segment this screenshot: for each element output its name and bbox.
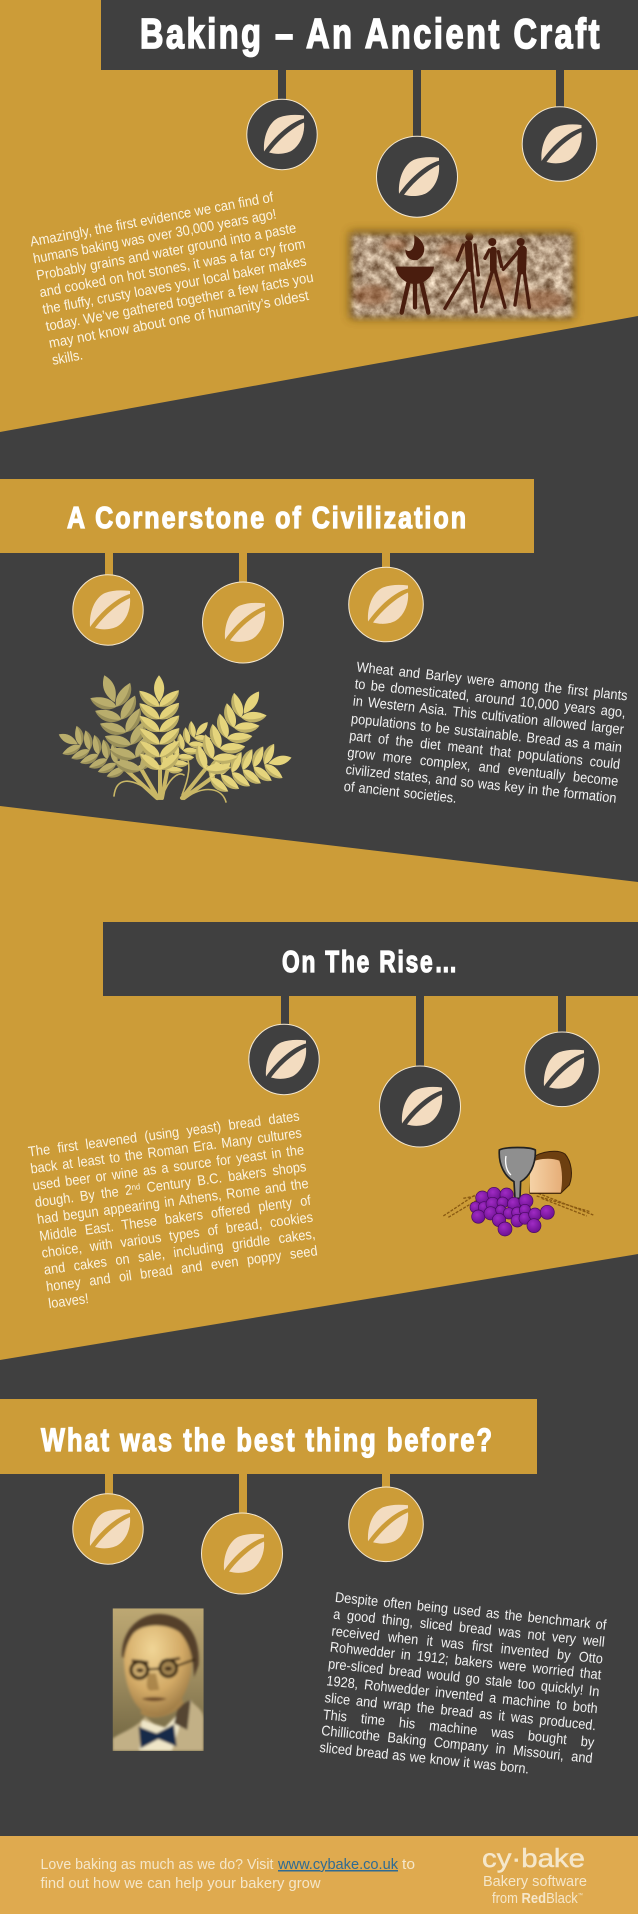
icon: hanging wheat grain medallions xyxy=(249,996,599,1147)
text block: leavened bread in the Roman era: The first leavened (using yeast) bread dates xyxy=(27,1109,301,1161)
text block: footer call to action: find out how we can help your bakery grow xyxy=(40,1875,321,1892)
text block: leavened bread in the Roman era: had begun appearing in Athens, Rome and the xyxy=(36,1176,310,1228)
heading bar: On The Rise xyxy=(103,922,638,996)
logo: cybake, bakery software from RedBlack: from RedBlack xyxy=(492,1890,583,1907)
text block: the invention of sliced bread: pre-sliced bread would go stale too quickly! In xyxy=(327,1657,600,1701)
image: portrait of Otto Rohwedder xyxy=(113,1608,204,1751)
text block: the invention of sliced bread: Despite often being used as the benchmark of xyxy=(334,1590,607,1634)
text block: the invention of sliced bread: Rohwedder in 1912; bakers were worried that xyxy=(329,1640,602,1684)
text block: footer call to action: www.cybake.co.uk xyxy=(277,1856,398,1873)
text block: first evidence of baking: and cooked on hot stones, it was a far cry from xyxy=(38,236,307,301)
text block: first evidence of baking: may not know about one of humanity’s oldest xyxy=(48,288,310,352)
text block: footer call to action xyxy=(40,1856,415,1892)
text block: first evidence of baking: Amazingly, the first evidence we can find of xyxy=(29,190,275,250)
icon: hanging wheat grain medallions xyxy=(73,1474,423,1594)
panel: section 3 on the rise xyxy=(27,922,638,1323)
text block: domestication of wheat and barley: to be domesticated, around 10,000 years ago, xyxy=(354,677,626,722)
logo: cybake, bakery software from RedBlack: Bakery software xyxy=(483,1873,587,1890)
logo: cybake, bakery software from RedBlack xyxy=(482,1843,587,1907)
text block: domestication of wheat and barley: Wheat and Barley were among the first plants xyxy=(356,660,628,704)
text block: the invention of sliced bread: a good thing, sliced bread was not very well xyxy=(332,1606,605,1650)
text block: domestication of wheat and barley: of ancient societies. xyxy=(343,779,457,807)
text block: domestication of wheat and barley: part of the diet meant that populations could xyxy=(348,728,621,773)
heading bar: A Cornerstone of Civilization xyxy=(0,479,534,553)
heading bar: A Cornerstone of Civilization: A Cornerstone of Civilization xyxy=(67,500,468,535)
text block: the invention of sliced bread: sliced bread as we know it was born. xyxy=(319,1740,530,1778)
text block: domestication of wheat and barley: populations to be sustainable. Bread as a main xyxy=(350,711,623,756)
heading bar: On The Rise: On The Rise… xyxy=(282,944,459,979)
heading bar: What was the best thing before? xyxy=(0,1399,537,1474)
text block: first evidence of baking: Probably grains and water ground into a paste xyxy=(35,220,298,284)
panel: section 1 ancient craft xyxy=(29,0,638,369)
text block: the invention of sliced bread: This time his machine was bought by xyxy=(322,1707,595,1751)
text block: leavened bread in the Roman era: used beer or wine as a source for yeast in the xyxy=(32,1142,305,1194)
text block: domestication of wheat and barley xyxy=(342,660,638,834)
text block: leavened bread in the Roman era: dough. By the 2nd Century B.C. bakers shops xyxy=(34,1159,307,1211)
panel: section 4 what was the best thing before xyxy=(0,1399,622,1798)
text block: leavened bread in the Roman era: loaves! xyxy=(47,1291,90,1312)
illustration: goblet, bread and grapes xyxy=(443,1147,593,1236)
illustration: wheat sheaf xyxy=(52,668,296,802)
text block: footer call to action: Love baking as much as we do? Visit xyxy=(40,1856,274,1873)
logo: cybake, bakery software from RedBlack: ™ xyxy=(578,1892,583,1899)
text block: leavened bread in the Roman era: Middle East. These bakers offered plenty of xyxy=(38,1193,312,1245)
text block: the invention of sliced bread: slice and wrap the bread as it was produced. xyxy=(324,1690,597,1734)
heading bar: What was the best thing before?: What was the best thing before? xyxy=(41,1422,494,1458)
logo: cybake, bakery software from RedBlack: cy·bake xyxy=(482,1843,585,1873)
text block: the invention of sliced bread: Chillicothe Baking Company in Missouri, and xyxy=(320,1723,593,1767)
text block: domestication of wheat and barley: in Western Asia. This cultivation allowed larger xyxy=(352,694,625,739)
panel: section 3 gold background xyxy=(0,806,638,1360)
text block: domestication of wheat and barley: civilized states, and so was key in the formation xyxy=(345,762,617,807)
text block: first evidence of baking: humans baking was over 30,000 years ago! xyxy=(32,207,278,267)
text block: first evidence of baking xyxy=(29,185,321,369)
text block: the invention of sliced bread xyxy=(317,1590,622,1798)
image: cave painting of figures around a fire xyxy=(346,228,578,322)
panel: footer xyxy=(0,1836,638,1914)
icon: hanging wheat grain medallions xyxy=(73,553,423,663)
text block: first evidence of baking: skills. xyxy=(51,347,84,369)
text block: the invention of sliced bread: received when it was first invented by Otto xyxy=(331,1623,604,1667)
panel: section 2 cornerstone of civilization xyxy=(0,479,638,834)
text block: leavened bread in the Roman era: and cakes on sale, including griddle cakes, xyxy=(43,1226,316,1279)
text block: footer call to action: to xyxy=(402,1856,415,1873)
icon: hanging wheat grain medallions xyxy=(247,70,597,217)
panel: section 1 gold background xyxy=(0,0,638,432)
text block: domestication of wheat and barley: grow more complex, and eventually become xyxy=(347,745,619,790)
text block: leavened bread in the Roman era xyxy=(27,1107,337,1323)
text block: first evidence of baking: today. We’ve gathered together a few facts you xyxy=(44,270,315,335)
text block: the invention of sliced bread: 1928, Rohwedder invented a machine to both xyxy=(326,1673,598,1717)
text block: leavened bread in the Roman era: honey and oil bread and even poppy seed xyxy=(45,1243,319,1295)
text block: leavened bread in the Roman era: back at least to the Roman Era. Many cultures xyxy=(29,1125,303,1177)
text block: first evidence of baking: the fluffy, crusty loaves your local baker makes xyxy=(41,254,308,318)
heading bar: Baking - An Ancient Craft xyxy=(101,0,638,70)
text block: leavened bread in the Roman era: choice, with various types of bread, cookies xyxy=(41,1210,314,1262)
